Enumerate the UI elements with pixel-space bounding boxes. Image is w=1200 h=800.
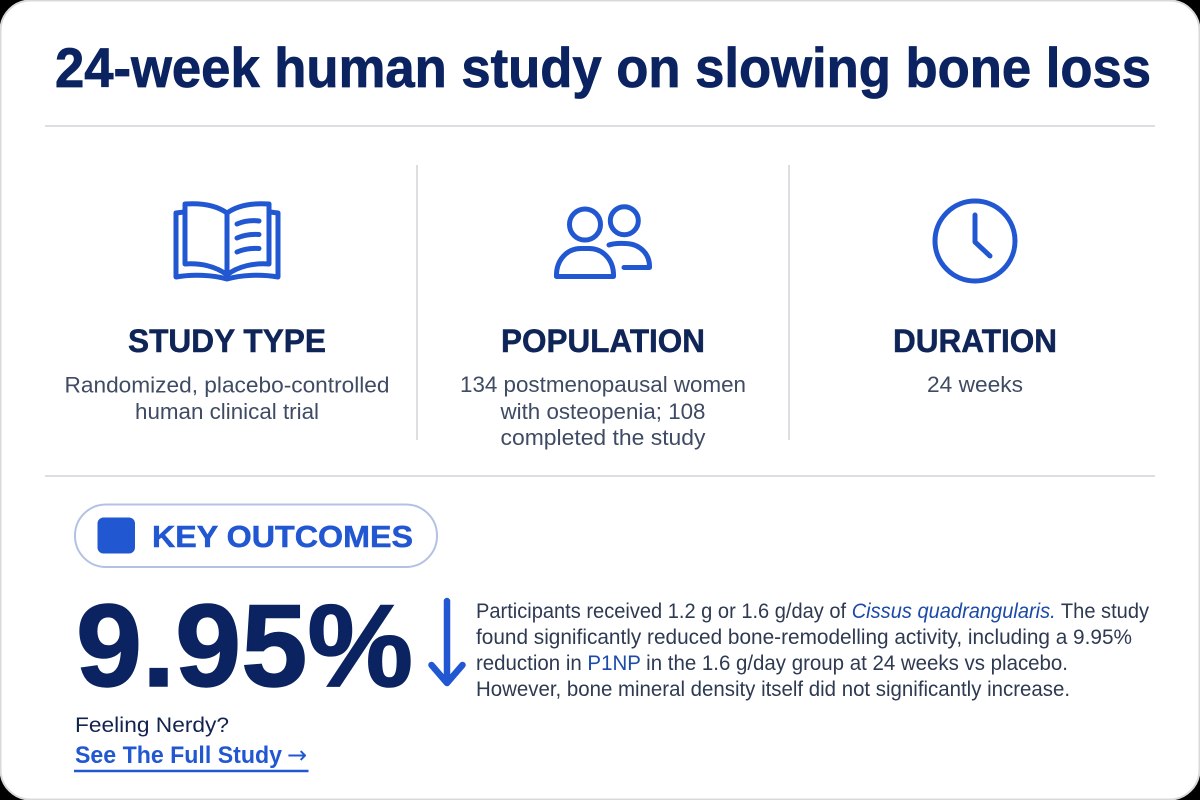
icon: clock xyxy=(935,201,1015,281)
text: outcome description: However, bone mineral density itself did not significantly increase. xyxy=(476,678,1070,701)
text: outcome description: Participants received 1.2 g or 1.6 g/day of Cissus quadrangularis. The study xyxy=(476,600,1149,623)
heading: population: POPULATION xyxy=(501,323,705,359)
badge: key outcomes xyxy=(75,504,437,567)
text: outcome description xyxy=(476,600,1149,701)
text: population description: completed the study xyxy=(500,425,706,450)
icon: people xyxy=(556,207,650,276)
badge: key outcomes: KEY OUTCOMES xyxy=(152,519,413,554)
text: study type description: Randomized, placebo-controlled xyxy=(64,372,390,398)
text: population description: 134 postmenopausal women xyxy=(460,372,746,397)
big number: 9.95% xyxy=(76,580,413,711)
icon: open book xyxy=(176,204,278,279)
link: see the full study: → xyxy=(287,741,307,769)
text: study type description: human clinical trial xyxy=(135,399,319,424)
panel: key outcomes xyxy=(74,504,1149,771)
title: 24-week human study on slowing bone loss xyxy=(55,36,1151,99)
panel: population xyxy=(460,207,746,450)
text: feeling nerdy: Feeling Nerdy? xyxy=(75,714,229,737)
text: duration description: 24 weeks xyxy=(927,372,1023,397)
arrow: down xyxy=(432,601,462,683)
panel: duration xyxy=(893,201,1057,397)
text: study type description xyxy=(64,372,390,424)
text: outcome description: reduction in P1NP in the 1.6 g/day group at 24 weeks vs placebo. xyxy=(476,652,1068,675)
text: population description xyxy=(460,372,746,450)
link: see the full study: See The Full Study xyxy=(75,742,283,769)
panel: study type xyxy=(64,204,390,424)
text: outcome description: found significantly reduced bone-remodelling activity, including a 9.95% xyxy=(476,626,1132,649)
heading: duration: DURATION xyxy=(893,323,1057,359)
heading: study type: STUDY TYPE xyxy=(128,323,326,359)
text: population description: with osteopenia; 108 xyxy=(499,399,706,424)
